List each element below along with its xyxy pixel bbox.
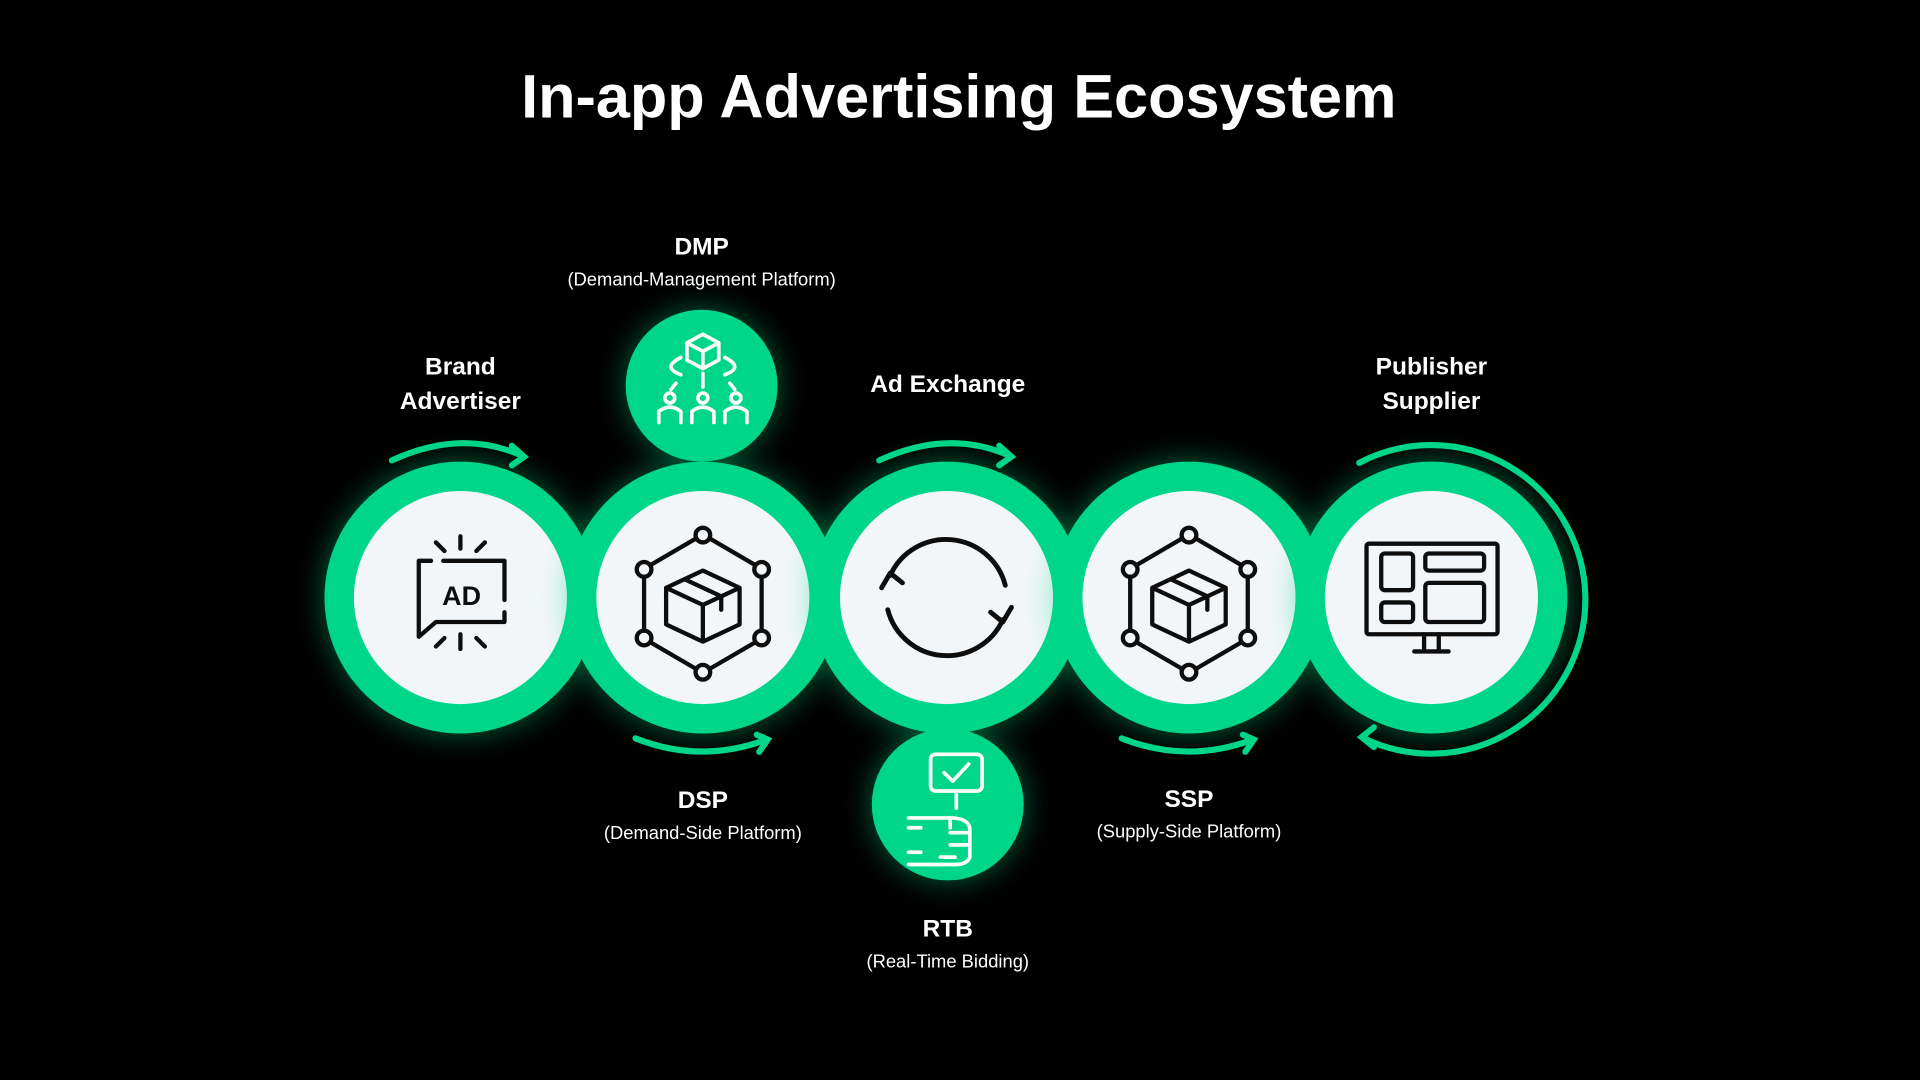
icon: hand with checked sign — [909, 754, 982, 864]
label: DMP: DMP — [674, 234, 729, 261]
circle: SSP — [1053, 462, 1325, 733]
label: publisher supplier: Publisher — [1376, 354, 1488, 381]
icon: sync arrows — [882, 539, 1011, 656]
arrow: publisher loop — [1359, 445, 1585, 754]
icon: people cube — [659, 334, 747, 422]
arrow: brand top — [392, 443, 524, 465]
circle: DMP — [626, 310, 778, 462]
arrow: SSP bottom — [1122, 735, 1254, 752]
label: DMP — [567, 234, 836, 289]
label: SSP — [1097, 786, 1281, 842]
label: DSP — [604, 787, 802, 843]
icon: cube network — [1123, 528, 1255, 680]
circle: DSP — [567, 462, 839, 733]
title: In-app Advertising Ecosystem — [521, 63, 1396, 131]
circle: publisher — [1296, 462, 1567, 733]
label: RTB — [866, 916, 1029, 971]
label: DSP: DSP — [678, 787, 728, 814]
icon: monitor layout — [1367, 544, 1498, 651]
label: SSP: (Supply-Side Platform) — [1097, 821, 1281, 842]
label: brand advertiser: Advertiser — [400, 388, 521, 415]
label: publisher supplier — [1376, 354, 1488, 415]
circle: brand advertiser — [324, 462, 596, 733]
label: RTB: (Real-Time Bidding) — [866, 950, 1029, 971]
label: brand advertiser — [400, 354, 521, 415]
label: DSP: (Demand-Side Platform) — [604, 822, 802, 843]
label: RTB: RTB — [923, 916, 973, 943]
label: brand advertiser: Brand — [425, 354, 496, 381]
circle: ad exchange — [811, 462, 1082, 733]
icon: AD: AD — [442, 581, 481, 611]
label: publisher supplier: Supplier — [1382, 388, 1481, 415]
icon: AD — [419, 536, 504, 649]
circle: RTB — [872, 729, 1024, 880]
arrow: exchange top — [879, 443, 1011, 465]
label: SSP: SSP — [1164, 786, 1213, 813]
label: DMP: (Demand-Management Platform) — [567, 268, 836, 289]
label: ad exchange: Ad Exchange — [870, 371, 1025, 398]
icon: cube network — [637, 528, 769, 680]
arrow: DSP bottom — [636, 735, 768, 752]
